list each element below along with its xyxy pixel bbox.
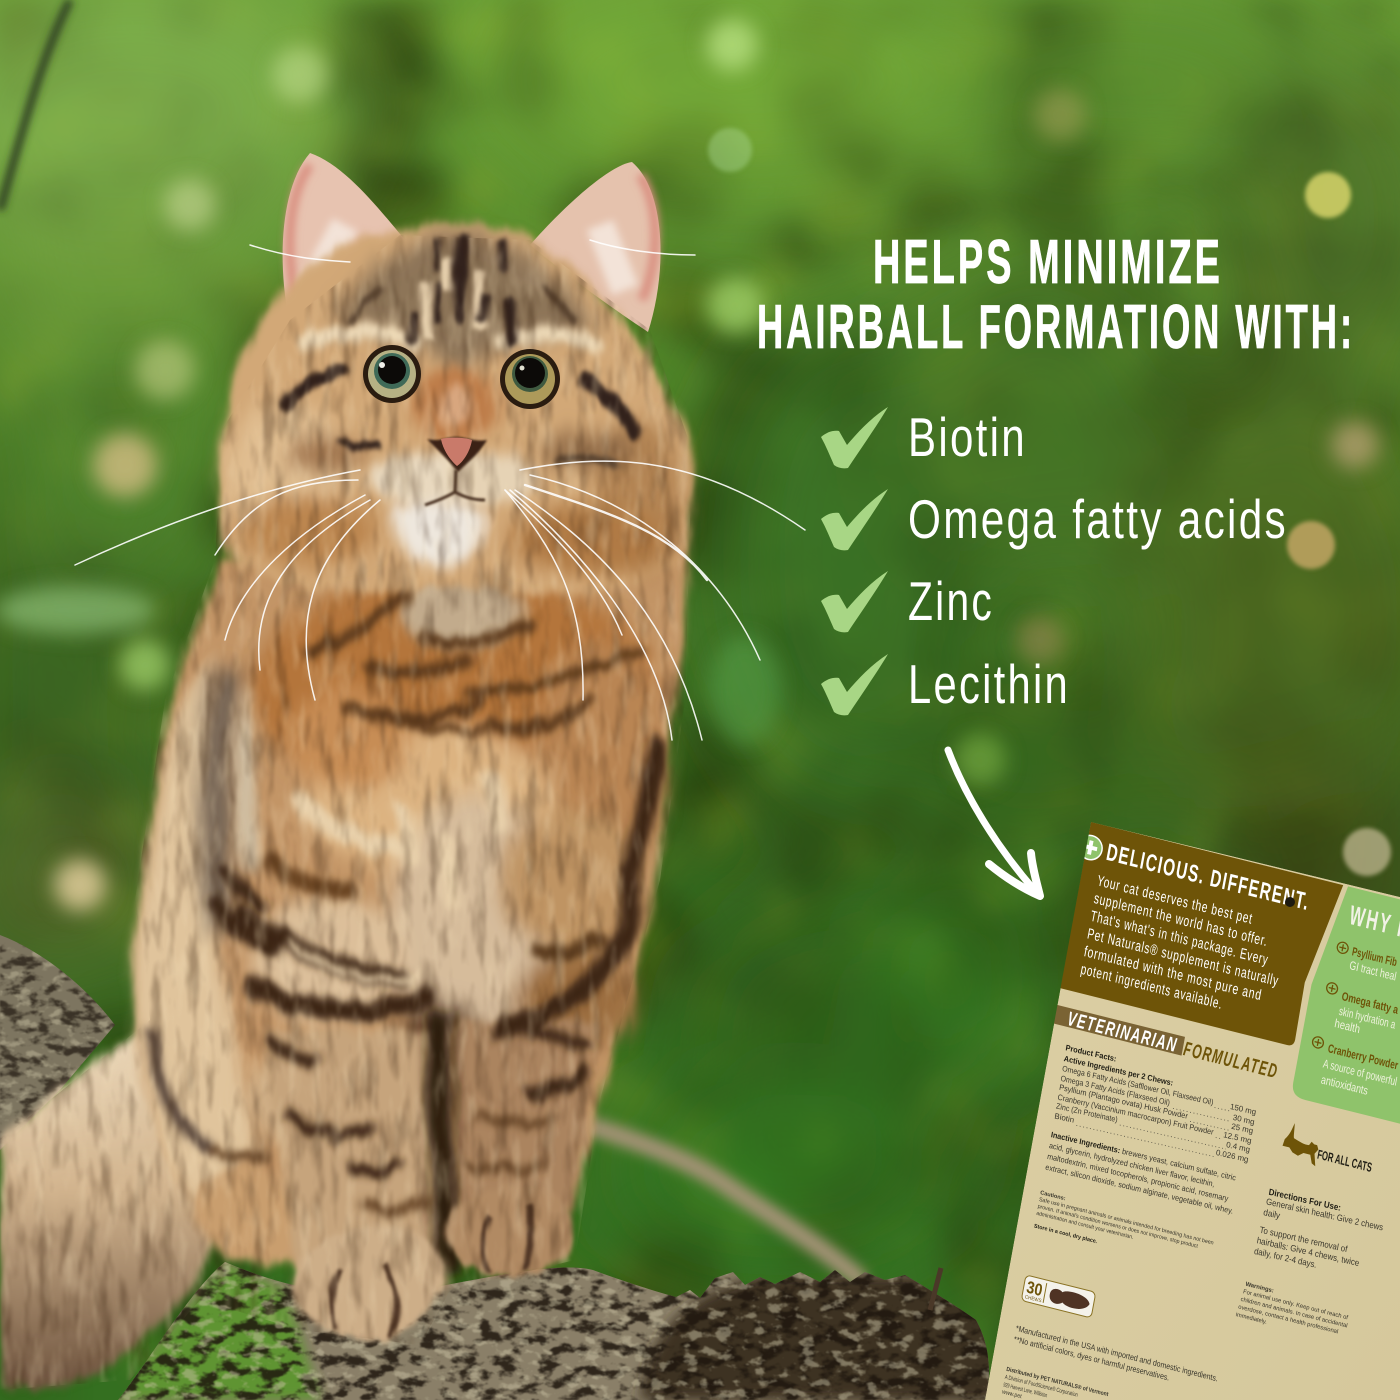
right paw [445,1185,573,1277]
check: Omega fatty acids [821,488,1288,550]
arrow [948,750,1040,896]
directions: To support the removal of [1259,1225,1349,1254]
cat ears [283,153,661,332]
package body [985,822,1400,1400]
product facts: Cranberry (Vaccinium macrocarpon) Fruit Powder [1057,1093,1215,1137]
product facts: 30 mg [1232,1113,1255,1127]
hind paw [190,1167,300,1265]
cat eyes [363,345,560,409]
warnings [1235,1281,1351,1345]
left paw [290,1225,446,1341]
veterinarian formulated banner: VETERINARIAN [1066,1008,1179,1057]
body stripes [150,745,656,1210]
flank grey [216,670,230,930]
chest folds [310,590,640,731]
product facts: Psyllium (Plantago ovata) Husk Powder [1059,1083,1189,1121]
inactive ingredients [1045,1130,1240,1216]
front legs [262,1030,445,1270]
intro copy: potent ingredients available. [1079,961,1224,1013]
intro copy: Pet Naturals® supplement is naturally [1086,925,1280,990]
product package back [985,820,1400,1400]
rock behind tail [0,930,120,1155]
upper-left twig [0,0,70,210]
warnings: overdose, contact a health professional [1238,1305,1339,1335]
nose bridge [414,367,498,443]
chest mass [245,575,665,1150]
check: Biotin: Biotin [908,406,1027,468]
background branch [593,1127,858,1278]
product facts: 0.4 mg [1226,1140,1251,1154]
fur texture [0,150,700,1400]
product facts: 0.026 mg [1215,1148,1249,1164]
whiskers [75,240,805,740]
warnings: For animal use only. Keep out of reach of [1243,1289,1349,1321]
cautions: Safe use in pregnant animals or animals intended for breeding has not been [1038,1197,1214,1247]
stain dot [1285,897,1295,907]
check: Lecithin [821,653,1070,715]
product facts: 25 mg [1231,1122,1254,1136]
count badge: CHEWS [1024,1294,1042,1304]
product facts: Zinc (Zn Proteinate) [1055,1102,1119,1124]
muzzle and chin [366,452,502,508]
cautions [1033,1190,1215,1273]
moss [110,1262,320,1400]
cautions: administration and consult your veterinarian. [1036,1211,1134,1241]
cat fur shapes [0,450,690,1389]
directions: hairballs: Give 4 chews, twice [1256,1235,1360,1268]
cat head [218,225,692,594]
veterinarian formulated banner [1051,1004,1280,1083]
check: Lecithin: Lecithin [908,653,1070,715]
twig [930,1268,941,1310]
product facts: Omega 3 Fatty Acids (Flaxseed Oil) [1060,1074,1171,1108]
product facts: 150 mg [1229,1102,1257,1117]
cat icon [1280,1121,1322,1166]
green panel: why [1291,882,1400,1124]
chest pale tufts [290,780,500,980]
intro copy: supplement the world has to offer. [1092,890,1269,950]
product facts: Active Ingredients per 2 Chews: [1063,1054,1174,1088]
directions: daily, for 2-4 days. [1253,1246,1317,1270]
intro copy: formulated with the most pure and [1083,943,1263,1004]
cat [0,150,805,1400]
check: Zinc: Zinc [908,570,994,632]
brow pale [300,332,600,350]
top panel: delicious [1052,820,1343,1051]
check: Biotin [821,406,1027,468]
dark bark end [640,1275,1000,1400]
cream haunch [134,650,258,1205]
product facts [1054,1043,1260,1164]
checklist [821,406,1288,715]
count badge [1021,1275,1096,1318]
product facts: Biotin [1054,1111,1075,1125]
green panel: why: health [1334,1016,1361,1036]
intro copy [1079,872,1290,1025]
directions [1253,1186,1386,1283]
directions: daily [1263,1207,1281,1221]
inactive ingredients: Inactive Ingredients: brewers yeast, calcium sulfate, citric [1050,1130,1237,1183]
footnotes: *Manufactured in the USA with imported and domestic ingredients. [1015,1323,1219,1383]
check: Zinc [821,570,994,632]
count badge: 30 [1025,1278,1044,1300]
check: Omega fatty acids: Omega fatty acids [908,488,1288,550]
heading [757,228,1355,362]
plus badge [1084,834,1103,860]
tuft [400,574,524,650]
product facts: 12.5 mg [1223,1130,1252,1145]
inactive ingredients: maltodextrin, mixed tocopherols, propionic acid, rosemary [1047,1152,1229,1203]
directions: Directions For Use: [1268,1187,1342,1213]
warnings: Warnings: [1245,1282,1274,1295]
cautions: Store in a cool, dry place. [1033,1224,1098,1245]
intro copy: Your cat deserves the best pet [1096,872,1254,928]
cautions: Cautions: [1040,1190,1066,1202]
head stripes [285,240,635,465]
product facts: Omega 6 Fatty Acids (Safflower Oil, Flaxseed Oil) [1062,1064,1214,1107]
cautions: proven. If animal's condition worsens or does not improve, stop product [1037,1204,1199,1250]
directions: General skin health: Give 2 chews [1265,1196,1384,1233]
inactive ingredients: extract, silicon dioxide, sodium alginate, vegetable oil, whey. [1045,1163,1234,1216]
inactive ingredients: acid, glycerin, hydrolyzed chicken liver flavor, lecithin, [1048,1141,1215,1189]
tail [0,1025,216,1389]
product facts: Product Facts: [1065,1043,1117,1064]
cat nose [425,437,487,505]
forehead patch [330,232,600,380]
intro copy: That's what's in this package. Every [1089,908,1270,969]
green panel: why: antioxidants [1320,1072,1369,1098]
log [110,1255,1000,1400]
body [134,450,690,1270]
warnings: immediately. [1235,1312,1268,1326]
warnings: children and animals. In case of accidental [1240,1297,1348,1330]
footnotes: **No artificial colors, dyes or harmful preservatives. [1013,1334,1170,1383]
veterinarian formulated banner: FORMULATED [1182,1038,1280,1083]
